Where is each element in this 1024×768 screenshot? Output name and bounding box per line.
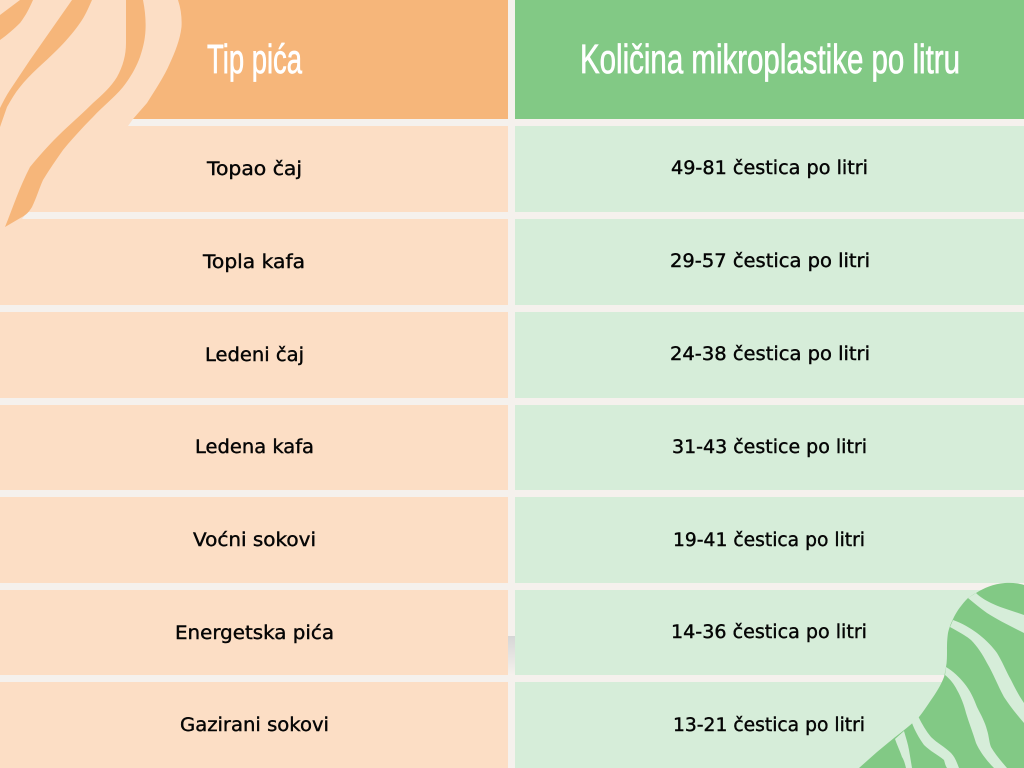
panel: right column <box>515 0 1024 768</box>
icon: green leaf bottom right <box>859 583 1024 768</box>
soft shadow in column gutter <box>508 636 515 675</box>
row 1 label: Topao čaj <box>206 159 302 180</box>
row 3 value: 24-38 čestica po litri <box>670 344 870 365</box>
heading: Tip pića: Tip pića <box>207 36 302 82</box>
row 4 label: Ledena kafa <box>195 437 314 458</box>
row cells: beverage type <box>0 126 508 768</box>
row 6 label: Energetska pića <box>175 623 334 644</box>
row 5 value: 19-41 čestica po litri <box>673 530 865 551</box>
row 5 label: Voćni sokovi <box>193 530 316 551</box>
row 7 label: Gazirani sokovi <box>180 715 329 736</box>
row cells: microplastics amount <box>515 126 1024 768</box>
panel: left column <box>0 0 508 768</box>
row 1 value: 49-81 čestica po litri <box>671 158 868 179</box>
row 2 label: Topla kafa <box>202 252 305 273</box>
icon: orange leaf top left <box>0 0 182 227</box>
row 4 value: 31-43 čestice po litri <box>672 437 867 458</box>
row 3 label: Ledeni čaj <box>205 345 304 366</box>
row 2 value: 29-57 čestica po litri <box>670 251 870 272</box>
row 6 value: 14-36 čestica po litri <box>671 622 867 643</box>
header cell: beverage type <box>0 0 508 119</box>
header cell: microplastics amount <box>515 0 1024 119</box>
row 7 value: 13-21 čestica po litri <box>673 715 865 736</box>
